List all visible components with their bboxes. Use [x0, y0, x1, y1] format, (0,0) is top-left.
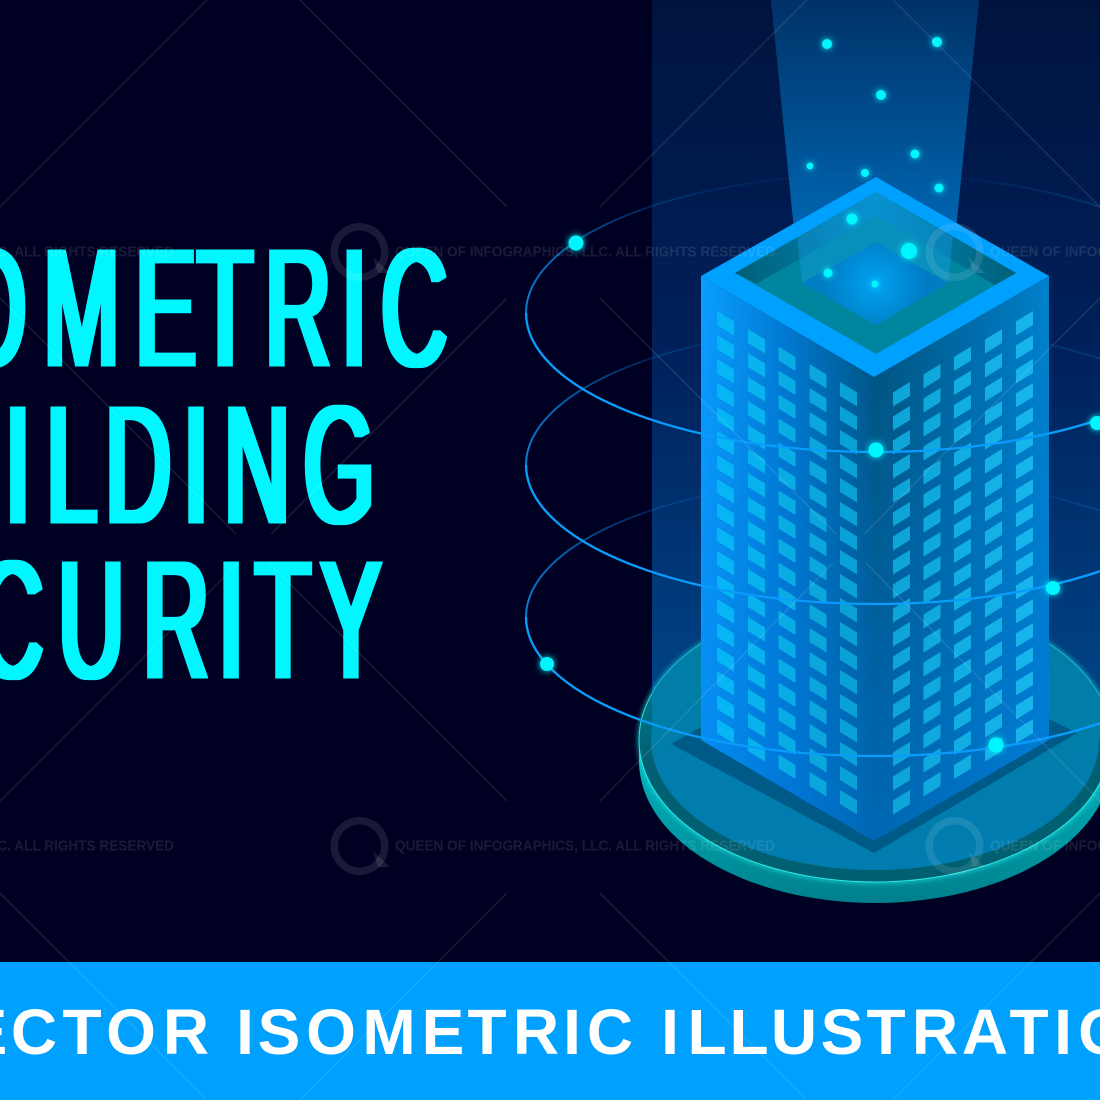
platform inner disc — [651, 610, 1099, 870]
watermark text row 2 — [0, 838, 1100, 854]
roof inner light diamond — [802, 242, 948, 325]
right windows — [893, 311, 1033, 814]
left face lift — [701, 276, 874, 841]
banner background — [0, 962, 1100, 1100]
watermark Q logos — [331, 223, 985, 875]
beam inside roof — [797, 192, 953, 325]
roof well floor — [735, 192, 1016, 354]
background light panel — [652, 0, 1100, 760]
orbit rings front halves — [526, 313, 1100, 756]
banner — [0, 962, 1100, 1100]
glowing data dots — [540, 37, 1100, 752]
building — [701, 177, 1049, 841]
roof rim — [701, 177, 1049, 377]
platform rim glow — [639, 598, 1100, 882]
title — [0, 213, 447, 714]
watermark text row 1 — [0, 244, 1100, 260]
platform top — [639, 598, 1100, 882]
roof well back walls — [735, 192, 1016, 285]
platform upper lit area — [652, 644, 1100, 740]
right face lift — [874, 276, 1049, 841]
watermark text row 2: QUEEN OF INFOGRAPHICS, LLC. ALL RIGHTS RESERVED — [395, 838, 775, 854]
right face — [874, 276, 1049, 841]
left face — [701, 276, 874, 841]
circular platform — [634, 638, 1100, 903]
orbit rings back halves — [526, 174, 1100, 756]
light beam above building — [771, 0, 979, 240]
left windows — [717, 311, 857, 814]
platform side — [639, 740, 1100, 903]
watermark text row 1: QUEEN OF INFOGRAPHICS, LLC. ALL RIGHTS RESERVED — [395, 244, 775, 260]
building shadow — [671, 719, 1077, 853]
